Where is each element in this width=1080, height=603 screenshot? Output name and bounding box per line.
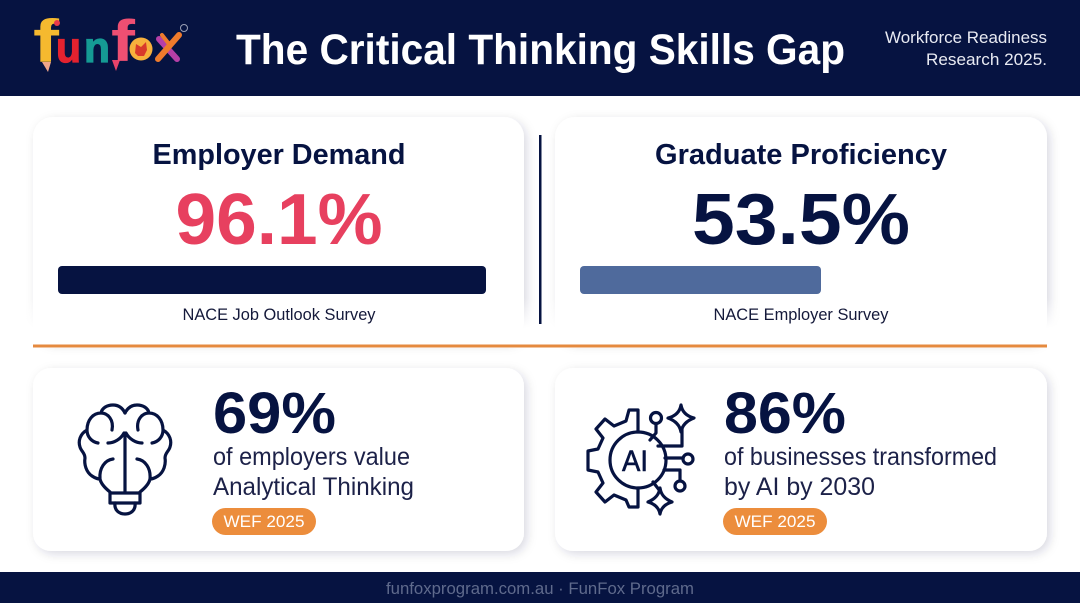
badge: WEF 2025 xyxy=(723,508,827,535)
panel: graduate proficiency xyxy=(542,117,1072,348)
heading: graduate proficiency: Graduate Proficiency xyxy=(655,139,947,171)
logo: funfox: u xyxy=(56,24,81,72)
bar: 53.5% xyxy=(580,266,821,294)
footer: funfoxprogram.com.au · FunFox Program xyxy=(386,579,694,598)
logo: funfox: f xyxy=(33,8,60,75)
logo: funfox xyxy=(33,8,188,75)
icon: AI gear xyxy=(588,405,694,514)
footer xyxy=(0,572,1080,603)
header band xyxy=(0,0,1080,96)
source: NACE Job Outlook Survey: NACE Job Outlook Survey xyxy=(182,305,376,324)
stat: 69%: 69% xyxy=(213,381,336,446)
panel: AI transformation xyxy=(555,368,1047,551)
description xyxy=(213,443,414,501)
description xyxy=(724,443,997,501)
badge: WEF 2025: WEF 2025 xyxy=(224,512,304,531)
description: of employers value xyxy=(213,443,410,471)
badge: WEF 2025 xyxy=(212,508,316,535)
stat: 96.1%: 96.1% xyxy=(176,180,382,260)
title: The Critical Thinking Skills Gap xyxy=(236,26,845,74)
header note xyxy=(885,28,1047,69)
description: by AI by 2030 xyxy=(724,473,875,501)
icon: AI gear: AI xyxy=(622,445,648,478)
description: Analytical Thinking xyxy=(213,473,414,501)
logo: funfox: n xyxy=(84,24,110,72)
bar: 96.1% xyxy=(58,266,486,294)
stat: 86%: 86% xyxy=(724,381,846,446)
icon: brain light bulb xyxy=(79,405,171,514)
panel: employer demand xyxy=(20,117,539,348)
header note: Research 2025. xyxy=(926,50,1047,69)
panel: analytical thinking xyxy=(33,368,524,551)
source: NACE Employer Survey: NACE Employer Survey xyxy=(714,305,889,324)
heading: employer demand: Employer Demand xyxy=(152,139,406,171)
header note: Workforce Readiness xyxy=(885,28,1047,47)
stat: 53.5%: 53.5% xyxy=(692,180,910,260)
logo: funfox: f xyxy=(111,9,136,74)
description: of businesses transformed xyxy=(724,443,997,471)
badge: WEF 2025: WEF 2025 xyxy=(734,512,816,531)
